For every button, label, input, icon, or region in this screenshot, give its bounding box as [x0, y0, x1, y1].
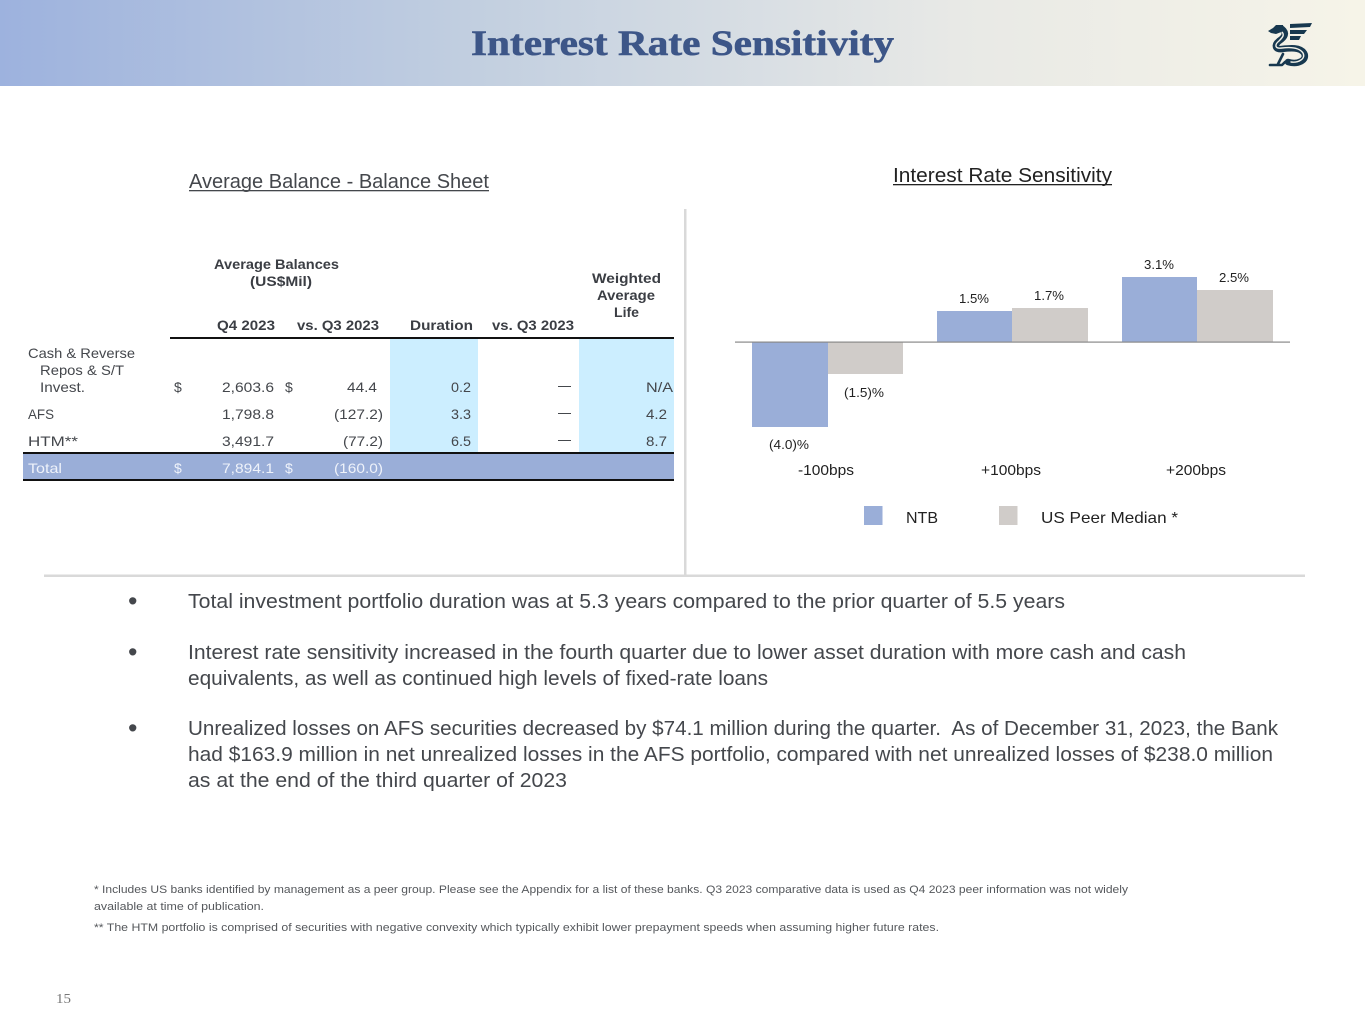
row: AFS — [28, 406, 667, 422]
row: HTM: HTM** — [28, 433, 79, 449]
footnotes: ** The HTM portfolio is comprised of securities with negative convexity which typically exhibit lower prepayment speeds when assuming higher future rates. — [94, 922, 939, 934]
row: cash: 0.2 — [451, 379, 471, 395]
bullet 3: had $163.9 million in net unrealized losses in the AFS portfolio, compared with net unrealized losses of $238.0 million — [188, 744, 1273, 766]
row: HTM: 3,491.7 — [222, 433, 274, 449]
duration column shading — [390, 339, 478, 453]
row: AFS: 1,798.8 — [222, 406, 274, 422]
bullet 3 — [128, 713, 1279, 792]
row: total: $ — [285, 460, 293, 476]
header band — [0, 0, 1365, 86]
table headers: Life — [614, 304, 639, 320]
table headers: Duration — [410, 317, 473, 333]
vertical divider — [684, 209, 686, 575]
table headers: Average — [597, 287, 655, 303]
data labels: 2.5% — [1219, 271, 1249, 285]
row: AFS: 4.2 — [646, 406, 667, 422]
table headers: vs. Q3 2023 — [297, 317, 379, 333]
row: cash: Invest. — [40, 379, 85, 395]
row: AFS: 3.3 — [451, 406, 471, 422]
table headers: Average Balances — [214, 256, 339, 272]
category labels: +100bps — [981, 462, 1041, 479]
legend: NTB — [906, 510, 938, 527]
row: cash — [28, 345, 674, 395]
table headers — [214, 256, 661, 333]
data labels: 1.5% — [959, 292, 989, 306]
row: cash: 2,603.6 — [222, 379, 274, 395]
bullet 1 — [128, 586, 1065, 616]
bullet 3: Unrealized losses on AFS securities decreased by $74.1 million during the quarter. As of December 31, 2023, the Bank — [188, 718, 1279, 740]
bullet 3: as at the end of the third quarter of 2023 — [188, 770, 567, 792]
bars: +100bps — [937, 308, 1088, 342]
category labels — [798, 462, 1226, 479]
row: total: $ — [174, 460, 182, 476]
horizontal divider — [44, 574, 1305, 577]
title: Interest Rate Sensitivity — [471, 23, 894, 63]
bullet 2 — [128, 637, 1186, 690]
row: total — [28, 460, 383, 476]
total row band — [23, 453, 674, 480]
text block: bullet points — [128, 586, 1279, 792]
category labels: +200bps — [1166, 462, 1226, 479]
row: cash: Cash & Reverse — [28, 345, 135, 361]
bullet 2: • — [128, 637, 137, 667]
row: HTM: 6.5 — [451, 433, 471, 449]
table headers: (US$Mil) — [250, 273, 312, 289]
table headers: Weighted — [592, 270, 661, 286]
bullet 2: equivalents, as well as continued high levels of fixed-rate loans — [188, 668, 768, 690]
data labels: 1.7% — [1034, 289, 1064, 303]
row: total: (160.0) — [334, 460, 383, 476]
bullet 1: Total investment portfolio duration was at 5.3 years compared to the prior quarter of 5.5 years — [188, 591, 1065, 613]
table headers: vs. Q3 2023 — [492, 317, 574, 333]
row: HTM: (77.2) — [343, 433, 383, 449]
weighted average life column shading — [579, 339, 674, 453]
data labels: (1.5)% — [844, 386, 884, 400]
row: AFS: (127.2) — [334, 406, 383, 422]
footnotes: * Includes US banks identified by management as a peer group. Please see the Appendix for a list of these banks. Q3 2023 comparative data is used as Q4 2023 peer information was not widely — [94, 884, 1129, 896]
row: cash: $ — [174, 379, 182, 395]
bars: -100bps — [752, 342, 903, 427]
row: cash: Repos & S/T — [40, 362, 124, 378]
table headers: Q4 2023 — [217, 317, 275, 333]
row: AFS: AFS — [28, 406, 54, 422]
page number: 15 — [56, 992, 71, 1007]
bullet 2: Interest rate sensitivity increased in the fourth quarter due to lower asset duration with more cash and cash — [188, 642, 1186, 664]
heading: chart: Interest Rate Sensitivity — [893, 165, 1112, 187]
row: HTM: 8.7 — [646, 433, 667, 449]
bar chart — [735, 258, 1290, 527]
row: total: 7,894.1 — [222, 460, 274, 476]
bullet 1: • — [128, 586, 137, 616]
bars: +200bps — [1122, 277, 1273, 342]
footnotes — [94, 884, 1129, 934]
row: HTM — [28, 433, 667, 449]
legend: US Peer Median * — [1041, 510, 1178, 527]
data labels — [769, 258, 1249, 452]
row: cash: 44.4 — [347, 379, 377, 395]
data labels: (4.0)% — [769, 438, 809, 452]
row: cash: N/A — [646, 379, 674, 395]
panel: balance table — [23, 256, 674, 481]
row: total: Total — [28, 460, 62, 476]
row: cash: $ — [285, 379, 293, 395]
icon: dragon logo — [1268, 23, 1312, 65]
footnotes: available at time of publication. — [94, 901, 264, 913]
bullet 3: • — [128, 713, 137, 743]
legend — [864, 506, 1178, 527]
heading: balance sheet: Average Balance - Balance Sheet — [189, 171, 489, 193]
category labels: -100bps — [798, 462, 854, 479]
data labels: 3.1% — [1144, 258, 1174, 272]
